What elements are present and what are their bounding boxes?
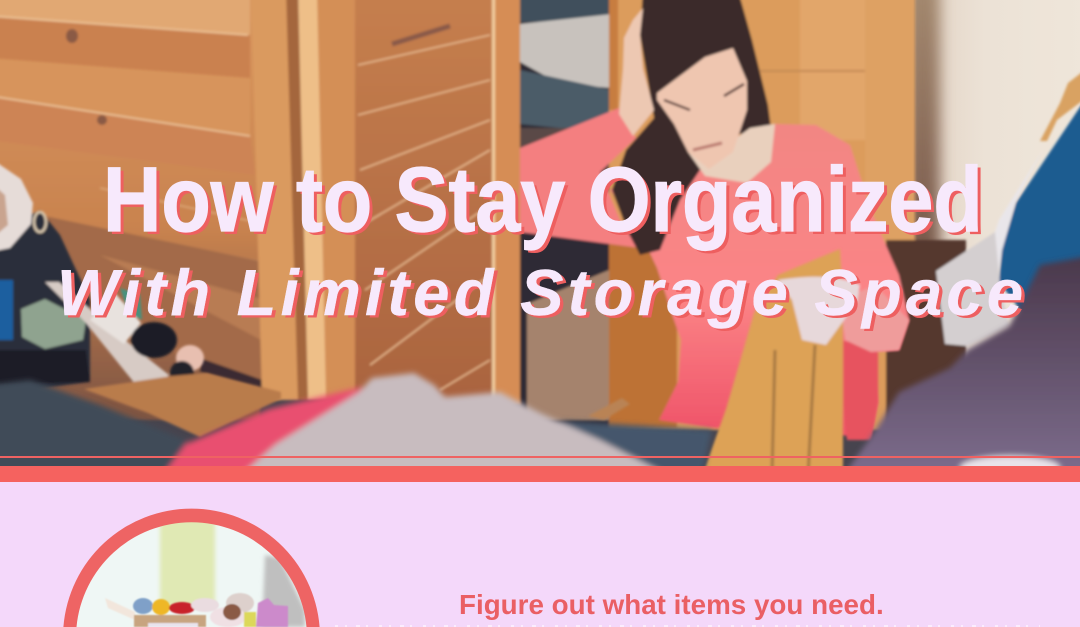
blue garment [999, 92, 1080, 312]
subtitle: With Limited Storage Space [57, 256, 1027, 329]
orange hanger [1040, 66, 1080, 141]
circular photo: box of clothes and shoes [63, 508, 1040, 627]
dark doll [131, 322, 177, 358]
white garment [985, 150, 1043, 275]
dark blanket right [843, 256, 1080, 476]
wood shelf [84, 373, 281, 437]
jeans [547, 420, 712, 476]
photo base [0, 0, 1080, 466]
hero photo: woman sitting by a cluttered wooden closet [0, 0, 1080, 466]
left clutter dark clothes [0, 210, 90, 395]
tops of the cropped body text line at the page edge [335, 625, 1040, 627]
sleeve at the wrist [840, 285, 909, 352]
closet frame and posts [251, 0, 305, 400]
grey sweater blanket [240, 373, 670, 476]
closet interior and shelves [520, 0, 612, 430]
shadowed wall column [905, 0, 940, 420]
left wood panel [0, 0, 260, 420]
cardboard box [527, 270, 609, 420]
hat string loop [34, 212, 46, 232]
pink blanket [162, 387, 420, 476]
wall right [915, 0, 1080, 360]
hair [612, 0, 771, 255]
hand on head [619, 8, 654, 136]
section heading: Figure out what items you need. [459, 589, 884, 620]
white cloth bottom [530, 440, 670, 476]
lower wood boards [40, 215, 270, 390]
floral fabric [21, 299, 86, 349]
yellow cloth [702, 249, 843, 476]
title: How to Stay Organized [103, 149, 983, 251]
wood behind woman [609, 0, 915, 430]
sweater body [610, 124, 909, 437]
neck and chest [688, 124, 775, 183]
floor clothes, left [0, 380, 190, 476]
doll fist [176, 345, 204, 371]
face [657, 48, 747, 169]
floor box lip [588, 398, 630, 420]
sleeve raised arm [520, 108, 640, 248]
white hat at left [0, 158, 33, 252]
coral band [0, 466, 1080, 482]
white roll [45, 282, 169, 395]
hand holding cloth [778, 277, 860, 345]
thin accent line [0, 456, 1080, 458]
red lower sweater edge [836, 340, 878, 440]
